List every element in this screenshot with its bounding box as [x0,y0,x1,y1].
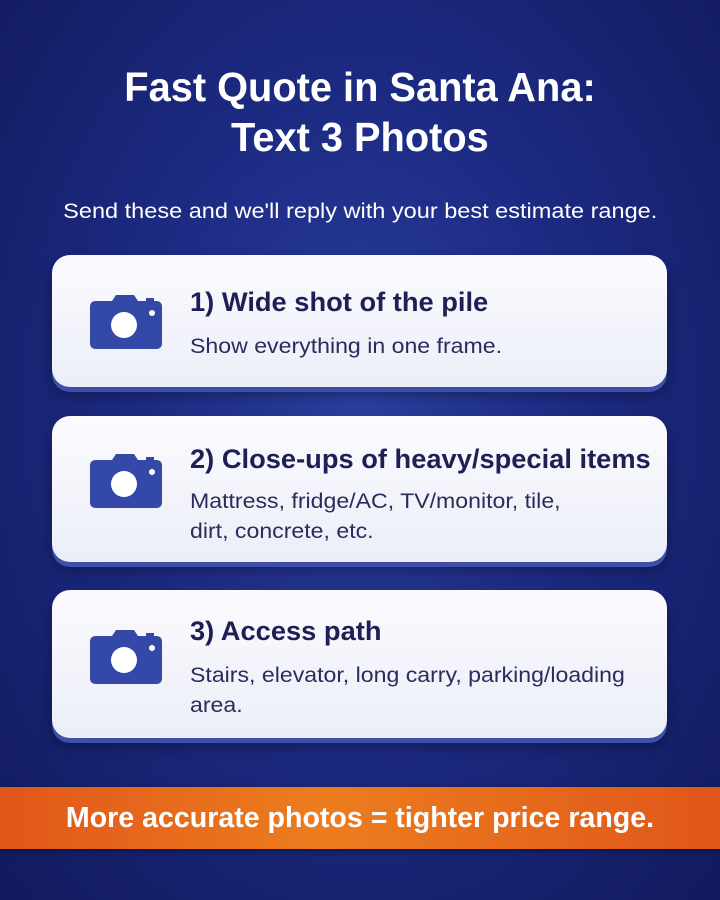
icon: camera [90,454,162,508]
footer band [0,787,720,849]
heading: 2) Close-ups of heavy/special items [190,444,651,474]
text: dirt, concrete, etc. [190,520,374,543]
title: Fast Quote in Santa Ana: [124,64,596,110]
text: Mattress, fridge/AC, TV/monitor, tile, [190,490,561,513]
panel: step 1 [52,255,667,387]
text [190,490,561,543]
icon: camera [90,295,162,349]
text: Show everything in one frame. [190,335,502,358]
panel: step 3 [52,590,667,738]
icon: camera [90,630,162,684]
text: area. [190,694,243,717]
title [124,64,596,160]
title: Text 3 Photos [231,114,489,160]
panel: step 2 [52,416,667,562]
text: Stairs, elevator, long carry, parking/loading [190,664,625,687]
subtitle: Send these and we'll reply with your best estimate range. [63,200,657,223]
heading: 1) Wide shot of the pile [190,287,488,317]
footer band: More accurate photos = tighter price range. [66,802,654,834]
text [190,664,625,717]
heading: 3) Access path [190,616,381,646]
